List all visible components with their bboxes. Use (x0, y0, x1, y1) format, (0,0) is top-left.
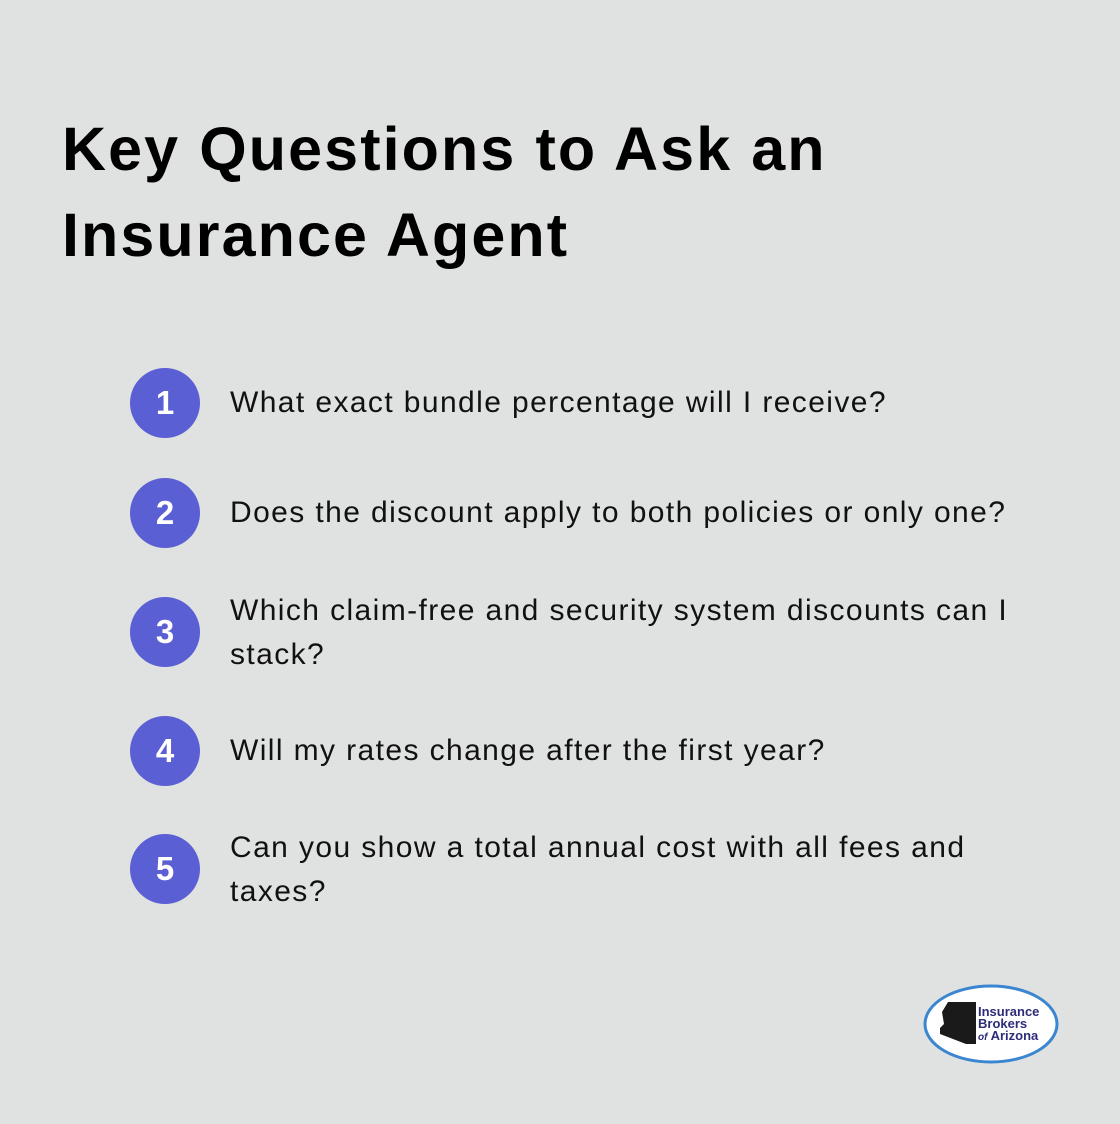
logo: Insurance (978, 1004, 1039, 1019)
title: Key Questions to Ask an (62, 115, 827, 183)
item 3: Which claim-free and security system discounts can I stack? (230, 594, 1008, 671)
item 2: Does the discount apply to both policies or only one? (230, 496, 1006, 529)
logo (924, 984, 1058, 1064)
item 4: Will my rates change after the first year? (230, 734, 826, 767)
item 2 (130, 478, 1006, 548)
item 2: 2 (156, 494, 174, 531)
logo: Brokers (978, 1016, 1027, 1031)
item 4: 4 (156, 732, 174, 769)
item 1: 1 (156, 384, 174, 421)
item 1: What exact bundle percentage will I receive? (230, 386, 887, 419)
item 4 (130, 716, 826, 786)
item 3: 3 (156, 613, 174, 650)
item 5: 5 (156, 850, 174, 887)
logo: of Arizona (978, 1028, 1039, 1043)
item 1 (130, 368, 887, 438)
title (62, 115, 827, 269)
item 5: Can you show a total annual cost with all fees and taxes? (230, 831, 965, 908)
title: Insurance Agent (62, 201, 569, 269)
